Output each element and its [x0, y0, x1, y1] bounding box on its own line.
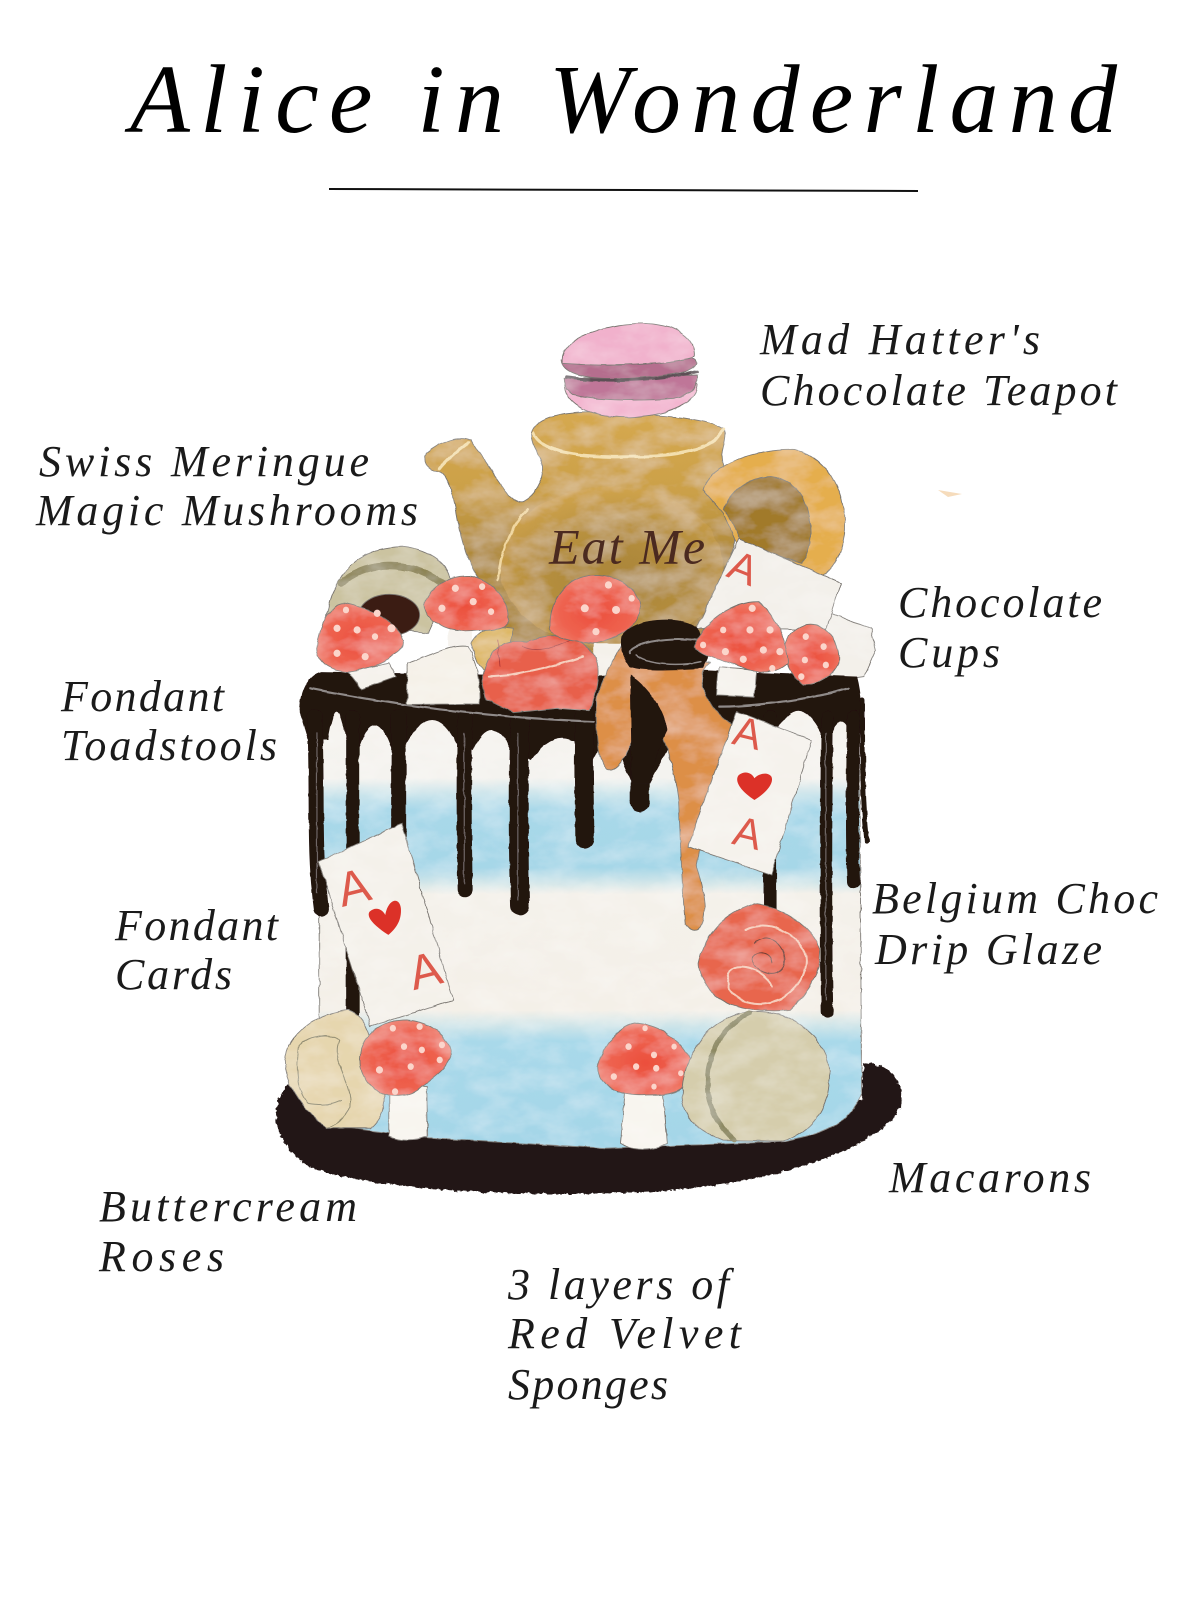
left card heart	[369, 901, 401, 935]
caramel drip and chocolate cup	[596, 647, 734, 930]
stem: lower left toadstool	[389, 1087, 428, 1140]
rose swirl highlight	[728, 926, 806, 1004]
stem: lower centre toadstool	[621, 1093, 667, 1149]
meringue swirl	[297, 1036, 351, 1128]
macaron filling	[566, 372, 696, 380]
cap: lower left toadstool	[360, 1020, 451, 1096]
glaze highlights	[310, 688, 594, 722]
drips	[315, 717, 321, 909]
top cards and fondant pieces	[594, 538, 876, 700]
handle inner shadow	[723, 477, 811, 563]
lower toadstool spots	[376, 1023, 683, 1095]
toadstool stem: left	[348, 663, 396, 689]
butter rose: lower right	[699, 903, 821, 1011]
label: 3 layers of Red Velvet Sponges: Red Velvet	[507, 1309, 743, 1358]
toadstool stem: centre-left	[449, 628, 472, 647]
label: Chocolate Cups	[898, 578, 1102, 677]
label: Belgium Choc Drip Glaze	[872, 874, 1158, 974]
toadstool cap: centre	[550, 575, 641, 643]
right top toadstools	[694, 602, 839, 697]
label: Buttercream Roses	[98, 1182, 357, 1281]
left playing card	[319, 823, 453, 1027]
label: Swiss Meringue Magic Mushrooms: Swiss Meringue	[39, 437, 369, 486]
label: Belgium Choc Drip Glaze: Drip Glaze	[874, 925, 1102, 974]
right card top letter: A	[729, 707, 767, 759]
label: Macarons: Macarons	[888, 1153, 1091, 1202]
buttercream meringue: lower left	[285, 1010, 384, 1128]
teapot handle	[703, 450, 845, 578]
caramel drips	[596, 647, 734, 930]
label: Fondant Toadstools: Toadstools	[61, 721, 277, 770]
label: Swiss Meringue Magic Mushrooms: Magic Mushrooms	[35, 486, 418, 535]
label: Fondant Cards	[114, 901, 280, 999]
label: Swiss Meringue Magic Mushrooms	[35, 437, 418, 535]
macaron upper foot	[561, 356, 696, 379]
macaron band	[707, 1013, 750, 1140]
small toadstool cap	[784, 624, 839, 685]
cream behind cup	[594, 643, 629, 700]
stray watercolour speck	[938, 490, 962, 497]
label: Buttercream Roses: Roses	[98, 1232, 224, 1281]
teapot lettering: Eat Me: Eat Me	[548, 518, 705, 574]
body highlight	[498, 510, 528, 580]
macaron bottom shell	[565, 383, 698, 417]
glaze top band	[299, 670, 862, 783]
lower toppings	[285, 903, 829, 1149]
rose swirl line	[752, 938, 785, 974]
toadstool spots: upper left	[333, 581, 635, 660]
gold chocolate shard	[471, 627, 513, 672]
right playing card	[687, 712, 812, 875]
label: Chocolate Cups: Cups	[898, 628, 1000, 677]
toadstool cap: left	[317, 603, 404, 672]
label: 3 layers of Red Velvet Sponges: Sponges	[508, 1360, 668, 1409]
back playing card	[696, 538, 841, 630]
label: Fondant Toadstools: Fondant	[60, 672, 226, 721]
spout opening highlight	[440, 443, 469, 468]
chocolate drip glaze	[299, 670, 867, 1013]
pink macaron	[561, 323, 698, 417]
lid rim highlight	[533, 430, 723, 457]
label: Belgium Choc Drip Glaze: Belgium Choc	[872, 874, 1158, 923]
rose petal line	[498, 633, 580, 667]
back macaron	[326, 547, 451, 633]
left card bottom letter: A	[403, 942, 447, 1001]
chocolate truffle	[359, 594, 420, 636]
illustration: decorated cake	[276, 323, 902, 1194]
label: Fondant Toadstools	[60, 672, 277, 770]
chocolate teapot	[425, 412, 845, 667]
toadstool cap: centre-left	[424, 576, 509, 631]
label: Buttercream Roses: Buttercream	[99, 1182, 357, 1231]
macaron: lower right	[682, 1012, 829, 1142]
right card bottom letter: A	[729, 807, 767, 859]
left toppings	[317, 575, 641, 713]
label: Mad Hatter's Chocolate Teapot: Mad Hatter's	[759, 315, 1040, 364]
cake board	[276, 1063, 902, 1194]
left card top letter: A	[332, 858, 376, 918]
label: Mad Hatter's Chocolate Teapot	[759, 315, 1119, 415]
swiss meringue piece	[407, 646, 480, 705]
title: Alice in Wonderland	[124, 46, 1118, 154]
butter rose on top	[482, 636, 598, 713]
right toadstool spots	[700, 605, 829, 680]
macaron lower foot	[564, 375, 697, 400]
label: Mad Hatter's Chocolate Teapot: Chocolate Teapot	[760, 366, 1119, 415]
rose highlight	[489, 657, 583, 677]
chocolate cup rim highlight	[629, 639, 696, 653]
stem of right toadstool	[716, 667, 757, 697]
label: Chocolate Cups: Chocolate	[898, 578, 1102, 627]
macaron top shell	[562, 323, 694, 365]
label: 3 layers of Red Velvet Sponges: 3 layers of	[507, 1260, 735, 1309]
right card heart	[737, 772, 772, 800]
back card letter: A	[722, 541, 765, 595]
dark chocolate over caramel	[630, 675, 667, 783]
teapot shade	[500, 487, 723, 647]
teapot body	[425, 412, 735, 667]
chocolate cup	[621, 620, 710, 670]
label: Fondant Cards: Cards	[115, 950, 232, 999]
cake body	[319, 700, 862, 1148]
cream fragment	[795, 613, 876, 687]
large toadstool cap	[694, 602, 788, 672]
back macaron band	[342, 566, 442, 583]
label: 3 layers of Red Velvet Sponges	[507, 1260, 743, 1409]
cap: lower centre toadstool	[598, 1023, 692, 1095]
label: Fondant Cards: Fondant	[114, 901, 280, 950]
title underline	[329, 189, 918, 191]
